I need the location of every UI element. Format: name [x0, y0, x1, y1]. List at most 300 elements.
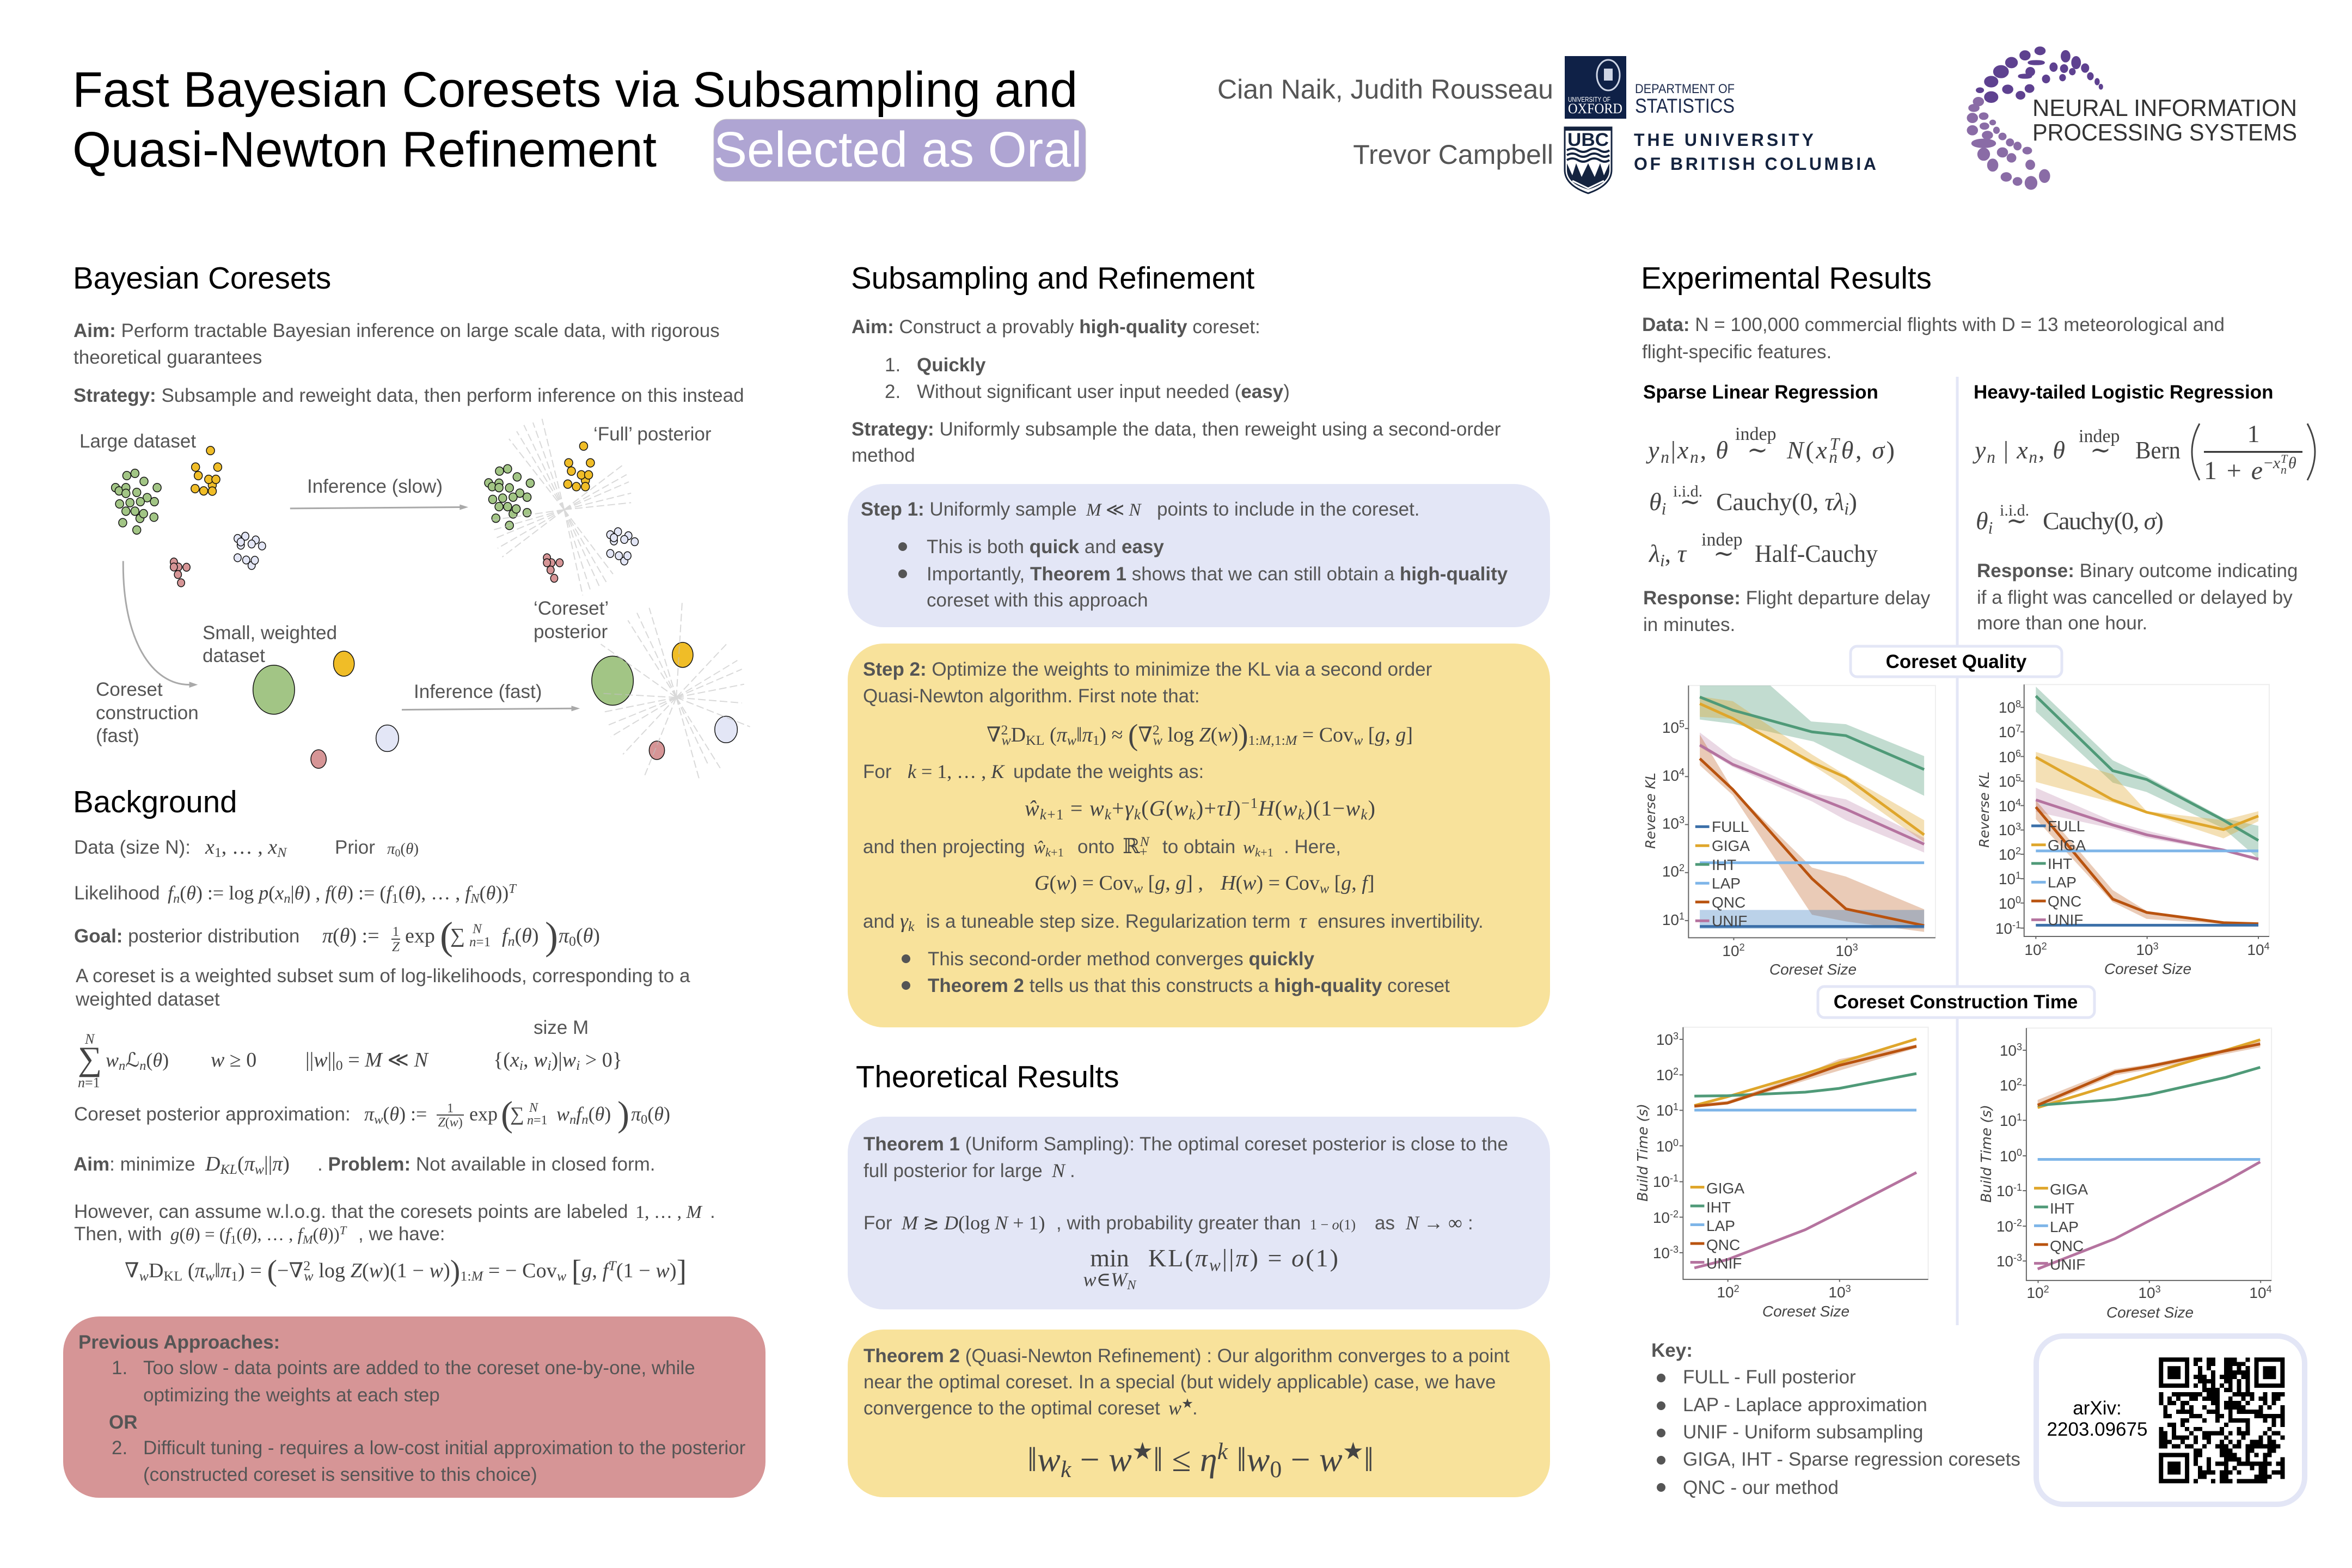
model: sparse linear regression: indep: [1701, 530, 1743, 550]
model: heavy-tailed logistic regression: indep: [2079, 426, 2120, 446]
diagram labels: [79, 424, 712, 746]
chart: reverse KL logistic regression: 108: [1999, 699, 2021, 716]
text: arxiv id: arXiv:: [2073, 1398, 2122, 1419]
diagram labels: ‘Full’ posterior: [593, 424, 712, 445]
chart: reverse KL logistic regression: Coreset Size: [2104, 960, 2191, 977]
text: data description: flight-specific features.: [1642, 341, 1832, 363]
model: sparse linear regression: [1643, 382, 1931, 635]
diagram labels: posterior: [534, 621, 608, 642]
text: coreset posterior approximation: exp: [469, 1103, 498, 1125]
key: GIGA, IHT - Sparse regression coresets: [1683, 1449, 2020, 1470]
chart: build time logistic regression: Build Time (s): [1979, 1105, 1995, 1203]
text: step 2 intro: [863, 659, 1432, 707]
chart: reverse KL logistic regression: GIGA: [2048, 837, 2086, 854]
text: likelihood: fn(θ) := log p(xn|θ) , f(θ) := (f1(θ), … , fN(θ))T: [168, 881, 516, 906]
text: step 2 intro: Quasi-Newton algorithm. First note that:: [863, 685, 1200, 707]
model: heavy-tailed logistic regression: Heavy-tailed Logistic Regression: [1974, 382, 2273, 403]
diagram labels: Inference (slow): [307, 476, 443, 497]
heading: bayesian coresets: Bayesian Coresets: [73, 261, 331, 295]
text: coreset posterior approximation: 1: [447, 1101, 454, 1116]
text: theorem 1: 1 − o(1): [1310, 1217, 1356, 1233]
model: sparse linear regression: ∼: [1713, 540, 1734, 567]
text: theorem 1: Theorem 1 (Uniform Sampling): The optimal coreset posterior is close to the: [863, 1134, 1508, 1155]
text: coreset definition: [75, 965, 690, 1010]
chart: reverse KL linear regression: 105: [1662, 719, 1685, 736]
chart: reverse KL linear regression: Reverse KL: [1643, 773, 1658, 849]
icon: qr code: [2159, 1359, 2284, 1481]
badge: coreset construction time: Coreset Construction Time: [1834, 991, 2078, 1013]
chart: build time linear regression: 10-3: [1653, 1244, 1679, 1261]
logo: oxford statistics: STATISTICS: [1635, 95, 1735, 117]
chart: reverse KL linear regression: 103: [1835, 942, 1858, 959]
title: Quasi-Newton Refinement: [72, 122, 657, 177]
text: theorem 1: N: [1051, 1160, 1066, 1181]
chart: build time logistic regression: 10-3: [1996, 1252, 2022, 1270]
chart: reverse KL linear regression: 102: [1722, 942, 1745, 959]
panel: step 2: [848, 644, 1550, 1027]
chart: build time linear regression: UNIF: [1706, 1255, 1742, 1272]
logo: oxford statistics: [1565, 56, 1735, 119]
text: coreset definition: weighted dataset: [75, 989, 220, 1010]
math: theorem 2 bound: ‖wk − w★‖ ≤ ηk ‖w0 − w★‖: [1027, 1438, 1374, 1483]
text: goal: (: [440, 914, 453, 958]
model: heavy-tailed logistic regression: ∼: [2006, 507, 2027, 535]
logo: neurips: PROCESSING SYSTEMS: [2032, 119, 2297, 146]
chart: build time logistic regression: 104: [2249, 1284, 2272, 1301]
logo: oxford statistics: OXFORD: [1568, 101, 1622, 117]
text: theorem 2: w★: [1168, 1396, 1193, 1419]
math: theorem 1 bound: KL(πw||π) = o(1): [1148, 1244, 1338, 1275]
chart: build time linear regression: 100: [1656, 1137, 1679, 1155]
text: coreset posterior approximation: [74, 1094, 670, 1134]
text: step size: is a tuneable step size. Regularization term: [926, 911, 1290, 932]
text: previous approaches: optimizing the weights at each step: [143, 1385, 440, 1406]
model: sparse linear regression: θi: [1649, 488, 1666, 518]
text: step size: τ: [1299, 910, 1307, 933]
math: coreset sum: ||w||0 = M ≪ N: [305, 1049, 430, 1073]
text: arxiv id: [2047, 1398, 2147, 1440]
panel: bayesian coresets: [73, 261, 750, 781]
logo: ubc: [1565, 127, 1876, 193]
chart: reverse KL logistic regression: 104: [1999, 797, 2021, 814]
text: data and prior: x1, … , xN: [205, 836, 286, 860]
math: G and H: H(w) = Covw [g, f]: [1221, 872, 1375, 896]
key: QNC - our method: [1683, 1477, 1839, 1498]
model: sparse linear regression: ∼: [1680, 488, 1700, 516]
text: step 2 bullets: [902, 948, 1450, 996]
math: hessian: ∇2wDKL (πw‖π1) ≈ (∇2w log Z(w))1:M,1:M = Covw [g, g]: [987, 718, 1413, 751]
text: previous approaches: (constructed coreset is sensitive to this choice): [143, 1464, 537, 1485]
chart: reverse KL linear regression: 102: [1662, 862, 1685, 880]
chart: reverse KL linear regression: UNIF: [1712, 912, 1747, 929]
chart: build time linear regression: 103: [1828, 1283, 1851, 1301]
model: heavy-tailed logistic regression: ∼: [2090, 436, 2111, 464]
text: step 1 bullets: Importantly, Theorem 1 shows that we can still obtain a high-quality: [927, 564, 1508, 585]
text: projecting: ŵk+1: [1033, 838, 1064, 859]
model: heavy-tailed logistic regression: θi: [1976, 507, 1993, 537]
authors: [1217, 74, 1553, 170]
model: sparse linear regression: Response: Flight departure delay: [1643, 587, 1931, 609]
chart: build time linear regression: 102: [1656, 1066, 1679, 1083]
arrow: inference slow: [290, 507, 460, 509]
text: coreset posterior approximation: π0(θ): [631, 1103, 670, 1127]
text: theorem 1: full posterior for large: [863, 1160, 1043, 1181]
math: coreset sum: n=1: [78, 1075, 100, 1091]
text: strategy: [852, 419, 1501, 466]
chart: reverse KL logistic regression: UNIF: [2048, 911, 2083, 928]
text: step 1: M ≪ N: [1086, 500, 1141, 520]
text: goal: N: [472, 922, 482, 936]
text: however: However, can assume w.l.o.g. that the coresets points are labeled: [74, 1201, 628, 1222]
title: Fast Bayesian Coresets via Subsampling and: [72, 62, 1077, 118]
model: heavy-tailed logistic regression: −x: [2264, 454, 2281, 472]
chart: reverse KL logistic regression: Reverse KL: [1976, 771, 1992, 848]
chart: reverse KL logistic regression: 102: [2024, 941, 2047, 958]
authors: Trevor Campbell: [1353, 139, 1553, 170]
chart: build time linear regression: 10-2: [1653, 1209, 1679, 1226]
diagram labels: construction: [96, 702, 199, 724]
text: step 1 bullets: coreset with this approach: [927, 590, 1148, 611]
chart: reverse KL linear regression: LAP: [1712, 875, 1741, 892]
text: numbered list: Without significant user input needed (easy): [917, 381, 1290, 402]
model: sparse linear regression: yn|xn, θ: [1646, 436, 1728, 467]
chart: reverse KL logistic regression: LAP: [2048, 874, 2077, 891]
text: step 1 bullets: This is both quick and easy: [927, 536, 1164, 558]
text: theorem 1: as: [1375, 1212, 1395, 1234]
panel: background: [73, 785, 715, 1287]
text: goal: n=1: [469, 935, 491, 950]
chart: build time logistic regression: QNC: [2050, 1238, 2084, 1254]
chart: build time logistic regression: 101: [2000, 1112, 2022, 1129]
diagram marks: [112, 419, 750, 781]
chart: build time linear regression: 102: [1717, 1283, 1739, 1301]
text: step size: and: [863, 911, 895, 932]
chart: build time logistic regression: 103: [2138, 1284, 2161, 1301]
model: heavy-tailed logistic regression: 1 + e: [2204, 456, 2263, 485]
text: data description: [1642, 314, 2225, 363]
text: aim: Aim: Perform tractable Bayesian inference on large scale data, with rigorous: [74, 320, 720, 341]
text: coreset posterior approximation: wnfn(θ): [556, 1103, 611, 1127]
heading: experimental results: Experimental Results: [1641, 261, 1932, 295]
key: [1651, 1340, 2020, 1498]
model: sparse linear regression: λi, τ: [1648, 540, 1687, 570]
text: theorem 1: N → ∞: [1406, 1212, 1462, 1234]
text: strategy: method: [852, 445, 915, 466]
text: data and prior: π0(θ): [387, 840, 419, 859]
text: strategy: Strategy: Subsample and reweight data, then perform inference on this instead: [74, 385, 744, 406]
logo: oxford statistics: DEPARTMENT OF: [1635, 82, 1735, 96]
badge: coreset quality: Coreset Quality: [1886, 651, 2027, 672]
text: data and prior: Prior: [335, 837, 375, 858]
chart: reverse KL logistic regression: FULL: [2048, 818, 2085, 835]
badge: coreset quality: [1851, 646, 2062, 677]
text: likelihood: Likelihood: [74, 883, 160, 904]
text: however: [74, 1201, 715, 1246]
chart: reverse KL logistic regression: 105: [1999, 773, 2021, 790]
model: sparse linear regression: Sparse Linear Regression: [1643, 382, 1878, 403]
chart: reverse KL logistic regression: [1976, 684, 2270, 977]
math: gradient of KL: ∇wDKL (πw‖π1) = (−∇2w log Z(w)(1 − w))1:M = − Covw [g, fT(1 − w)]: [125, 1253, 687, 1287]
text: goal: [74, 914, 600, 958]
text: coreset posterior approximation: Z(w): [438, 1116, 463, 1130]
model: sparse linear regression: Cauchy(0, τλi): [1716, 488, 1857, 518]
model: heavy-tailed logistic regression: yn | xn, θ: [1973, 436, 2065, 467]
chart: reverse KL logistic regression: 103: [2136, 941, 2159, 958]
chart: build time logistic regression: 103: [2000, 1042, 2022, 1059]
panel: arxiv link: [2036, 1336, 2305, 1504]
text: step 1 bullets: [898, 536, 1508, 611]
text: previous approaches: Previous Approaches:: [78, 1332, 280, 1353]
text: step 2 bullets: Theorem 2 tells us that this constructs a high-quality coreset: [928, 975, 1450, 996]
diagram labels: dataset: [203, 645, 265, 666]
text: previous approaches: Difficult tuning - requires a low-cost initial approximation to the posterior: [143, 1437, 746, 1459]
text: projecting: . Here,: [1284, 836, 1341, 857]
chart: build time logistic regression: LAP: [2050, 1218, 2079, 1235]
panel: step 1: [848, 484, 1550, 627]
math: theorem 1 bound: [1083, 1244, 1338, 1293]
chart: reverse KL linear regression: 104: [1662, 767, 1685, 784]
text: coreset posterior approximation: N: [529, 1101, 539, 1115]
text: step 2 bullets: This second-order method converges quickly: [928, 948, 1315, 970]
text: size M: size M: [534, 1017, 589, 1038]
text: aim and problem: Aim: minimize: [74, 1154, 195, 1175]
chart: build time linear regression: 10-1: [1653, 1173, 1679, 1190]
math: G and H: G(w) = Covw [g, g] ,: [1034, 872, 1203, 896]
key: UNIF - Uniform subsampling: [1683, 1422, 1923, 1443]
text: previous approaches: Too slow - data points are added to the coreset one-by-one, while: [143, 1357, 695, 1379]
badge: coreset construction time: [1818, 987, 2094, 1018]
text: theorem 2: .: [1192, 1398, 1198, 1419]
model: heavy-tailed logistic regression: n: [2281, 463, 2287, 476]
text: theorem 2: convergence to the optimal coreset: [863, 1398, 1160, 1419]
heading: subsampling and refinement: Subsampling and Refinement: [851, 261, 1255, 295]
text: aim and problem: . Problem: Not available in closed form.: [317, 1154, 656, 1175]
model: heavy-tailed logistic regression: i.i.d.: [2000, 501, 2029, 519]
text: however: Then, with: [74, 1223, 162, 1245]
chart: build time linear regression: Build Time (s): [1635, 1104, 1651, 1202]
text: goal: π0(θ): [559, 924, 600, 949]
chart: reverse KL linear regression: IHT: [1712, 856, 1736, 873]
text: strategy: Strategy: Uniformly subsample the data, then reweight using a second-order: [852, 419, 1501, 440]
text: theorem 2: [863, 1345, 1510, 1419]
text: projecting: to obtain: [1162, 836, 1235, 857]
panel: experimental results: [1635, 261, 2315, 1325]
model: heavy-tailed logistic regression: T: [2281, 452, 2288, 465]
arrow: coreset construction: [123, 561, 190, 685]
text: coreset definition: A coreset is a weighted subset sum of log-likelihoods, corresponding to a: [76, 965, 690, 987]
text: however: .: [710, 1201, 715, 1222]
model: heavy-tailed logistic regression: Response: Binary outcome indicating: [1977, 560, 2298, 581]
key: Key:: [1651, 1340, 1693, 1361]
text: step 1: Step 1: Uniformly sample: [861, 499, 1077, 520]
chart: reverse KL logistic regression: 107: [1999, 723, 2021, 740]
model: sparse linear regression: i.i.d.: [1673, 482, 1702, 500]
chart: build time logistic regression: GIGA: [2050, 1181, 2088, 1198]
chart: reverse KL linear regression: 101: [1662, 911, 1685, 928]
column divider: [1956, 377, 1959, 1325]
text: projecting: and then projecting: [863, 836, 1025, 857]
text: step size: γk: [900, 910, 914, 934]
text: goal: ∑: [450, 924, 465, 947]
chart: build time linear regression: Coreset Size: [1762, 1303, 1849, 1320]
model: sparse linear regression: ∼: [1747, 436, 1768, 464]
text: goal: exp: [405, 924, 435, 947]
authors: Cian Naik, Judith Rousseau: [1217, 74, 1553, 105]
chart: reverse KL logistic regression: 100: [1999, 895, 2021, 912]
heading: theoretical results: Theoretical Results: [856, 1059, 1119, 1094]
text: aim second line: theoretical guarantees: [74, 347, 262, 368]
text: goal: Z: [392, 940, 400, 954]
chart: build time linear regression: QNC: [1706, 1236, 1740, 1253]
chart: reverse KL logistic regression: 10-1: [1995, 920, 2021, 937]
chart: reverse KL logistic regression: QNC: [2048, 893, 2081, 910]
model: sparse linear regression: in minutes.: [1643, 614, 1735, 635]
logo: neurips: [1968, 47, 2297, 189]
text: coreset posterior approximation: ): [617, 1094, 629, 1134]
arrow: inference fast: [402, 708, 572, 710]
math: coreset sum: w ≥ 0: [211, 1049, 256, 1071]
math: coreset sum: wnℒn(θ): [106, 1049, 169, 1073]
model: sparse linear regression: N(xnTθ, σ): [1786, 434, 1895, 467]
text: theorem 1: M ≳ D(log N + 1): [902, 1212, 1045, 1234]
math: theorem 1 bound: w∈WN: [1083, 1269, 1137, 1293]
text: data description: Data: N = 100,000 commercial flights with D = 13 meteorological and: [1642, 314, 2225, 335]
diagram labels: ‘Coreset’: [534, 598, 609, 619]
text: coreset posterior approximation: Coreset posterior approximation:: [74, 1104, 351, 1125]
text: for loop: For: [863, 761, 892, 782]
math: coreset sum: N: [84, 1031, 95, 1047]
text: theorem 2: Theorem 2 (Quasi-Newton Refinement) : Our algorithm converges to a point: [863, 1345, 1510, 1367]
logo: ubc: UBC: [1567, 130, 1609, 150]
text: data and prior: Data (size N):: [74, 837, 191, 858]
text: however: g(θ) = (f1(θ), … , fM(θ))T: [170, 1223, 346, 1246]
text: previous approaches: 2.: [112, 1437, 127, 1459]
panel: subsampling and refinement: [851, 261, 1501, 466]
text: coreset posterior approximation: n=1: [527, 1113, 548, 1128]
math: theorem 1 bound: min: [1090, 1244, 1129, 1272]
text: aim: Aim: Construct a provably high-quality coreset:: [852, 316, 1260, 338]
text: previous approaches: 1.: [112, 1357, 127, 1379]
math: coreset sum: ∑: [78, 1040, 102, 1077]
text: numbered list: 1.: [885, 354, 901, 376]
text: previous approaches: [78, 1332, 746, 1485]
chart: reverse KL logistic regression: 101: [1999, 870, 2021, 887]
chart: build time logistic regression: Coreset Size: [2106, 1304, 2194, 1321]
diagram labels: Inference (fast): [414, 681, 542, 702]
model: heavy-tailed logistic regression: 1: [2247, 420, 2259, 448]
text: numbered list: Quickly: [917, 354, 986, 376]
model: sparse linear regression: indep: [1735, 424, 1777, 444]
chart: reverse KL logistic regression: IHT: [2048, 855, 2072, 872]
title: [72, 62, 1077, 177]
key: LAP - Laplace approximation: [1683, 1394, 1927, 1416]
heading: background: Background: [73, 785, 237, 819]
chart: build time logistic regression: [1979, 1028, 2272, 1321]
text: coreset posterior approximation: (: [501, 1094, 513, 1134]
panel: previous approaches: [63, 1316, 765, 1498]
chart: reverse KL linear regression: QNC: [1712, 894, 1745, 911]
chart: reverse KL logistic regression: 106: [1999, 748, 2021, 765]
math: coreset sum: [78, 1031, 622, 1091]
text: step 2 intro: Step 2: Optimize the weights to minimize the KL via a second order: [863, 659, 1432, 680]
chart: build time linear regression: LAP: [1706, 1217, 1735, 1234]
chart: reverse KL linear regression: 103: [1662, 814, 1685, 832]
text: theorem 2: near the optimal coreset. In a special (but widely applicable) case, we have: [863, 1371, 1496, 1393]
chart: reverse KL logistic regression: 103: [1999, 821, 2021, 838]
text: arxiv id: 2203.09675: [2047, 1419, 2147, 1440]
chart: build time logistic regression: IHT: [2050, 1200, 2074, 1217]
panel: theorem 1: [848, 1117, 1550, 1309]
math: coreset sum: {(xi, wi)|wi > 0}: [493, 1049, 622, 1073]
chart: reverse KL linear regression: FULL: [1712, 818, 1749, 835]
text: however: 1, … , M: [635, 1202, 702, 1222]
logo: neurips: NEURAL INFORMATION: [2032, 95, 2297, 121]
chart: build time logistic regression: 10-1: [1996, 1182, 2022, 1199]
diagram labels: Large dataset: [79, 431, 196, 452]
chart: build time linear regression: [1635, 1027, 1928, 1320]
chart: build time linear regression: 101: [1656, 1101, 1679, 1119]
diagram labels: Coreset: [96, 679, 163, 700]
text: numbered list: 2.: [885, 381, 901, 402]
text: numbered list: [885, 354, 1290, 402]
chart: build time logistic regression: UNIF: [2050, 1256, 2085, 1273]
text: goal: fn(θ): [502, 924, 538, 949]
badge: selected as oral: Selected as Oral: [714, 122, 1082, 177]
text: step 1: points to include in the coreset.: [1157, 499, 1420, 520]
chart: reverse KL logistic regression: 102: [1999, 846, 2021, 863]
text: theorem 1: :: [1468, 1212, 1473, 1234]
chart: build time logistic regression: 10-2: [1996, 1217, 2022, 1235]
model: heavy-tailed logistic regression: if a flight was cancelled or delayed by: [1977, 587, 2293, 608]
chart: build time linear regression: IHT: [1706, 1199, 1731, 1216]
chart: reverse KL linear regression: GIGA: [1712, 837, 1750, 854]
text: previous approaches: OR: [109, 1412, 137, 1433]
model: heavy-tailed logistic regression: Bern: [2135, 436, 2180, 464]
text: theorem 1: [863, 1134, 1508, 1234]
text: theorem 1: For: [863, 1212, 892, 1234]
chart: build time logistic regression: 102: [2026, 1284, 2049, 1301]
text: theorem 1: , with probability greater than: [1056, 1212, 1301, 1234]
text: step size: ensures invertibility.: [1318, 911, 1484, 932]
text: goal: Goal: posterior distribution: [74, 926, 299, 947]
model: heavy-tailed logistic regression: [1973, 382, 2315, 634]
logo: ubc: OF BRITISH COLUMBIA: [1634, 154, 1876, 174]
diagram labels: (fast): [96, 725, 139, 746]
key: FULL - Full posterior: [1683, 1367, 1856, 1388]
text: coreset posterior approximation: πw(θ) :=: [364, 1103, 427, 1127]
chart: build time logistic regression: 100: [2000, 1147, 2022, 1165]
text: aim and problem: DKL(πw||π): [205, 1153, 290, 1177]
text: projecting: wk+1: [1243, 838, 1273, 859]
text: projecting: ℝN+: [1123, 834, 1149, 860]
panel: theorem 2: [848, 1330, 1550, 1497]
chart: reverse KL linear regression: [1643, 685, 1935, 978]
text: however: , we have:: [358, 1223, 445, 1245]
text: coreset posterior approximation: ∑: [510, 1103, 524, 1125]
model: heavy-tailed logistic regression: Cauchy(0, σ): [2043, 507, 2164, 535]
math: update: ŵk+1 = wk+γk(G(wk)+τI)−1H(wk)(1−wk): [1025, 795, 1375, 823]
text: projecting: onto: [1077, 836, 1114, 857]
logo: ubc: THE UNIVERSITY: [1634, 130, 1814, 150]
chart: build time linear regression: GIGA: [1706, 1180, 1744, 1197]
text: goal: ): [545, 914, 558, 958]
diagram labels: Small, weighted: [203, 622, 337, 644]
model: heavy-tailed logistic regression: θ: [2288, 454, 2296, 472]
text: goal: 1: [393, 924, 399, 939]
model: heavy-tailed logistic regression: more than one hour.: [1977, 612, 2147, 634]
chart: reverse KL linear regression: Coreset Size: [1769, 961, 1857, 978]
diagram: coreset overview: [79, 419, 750, 781]
